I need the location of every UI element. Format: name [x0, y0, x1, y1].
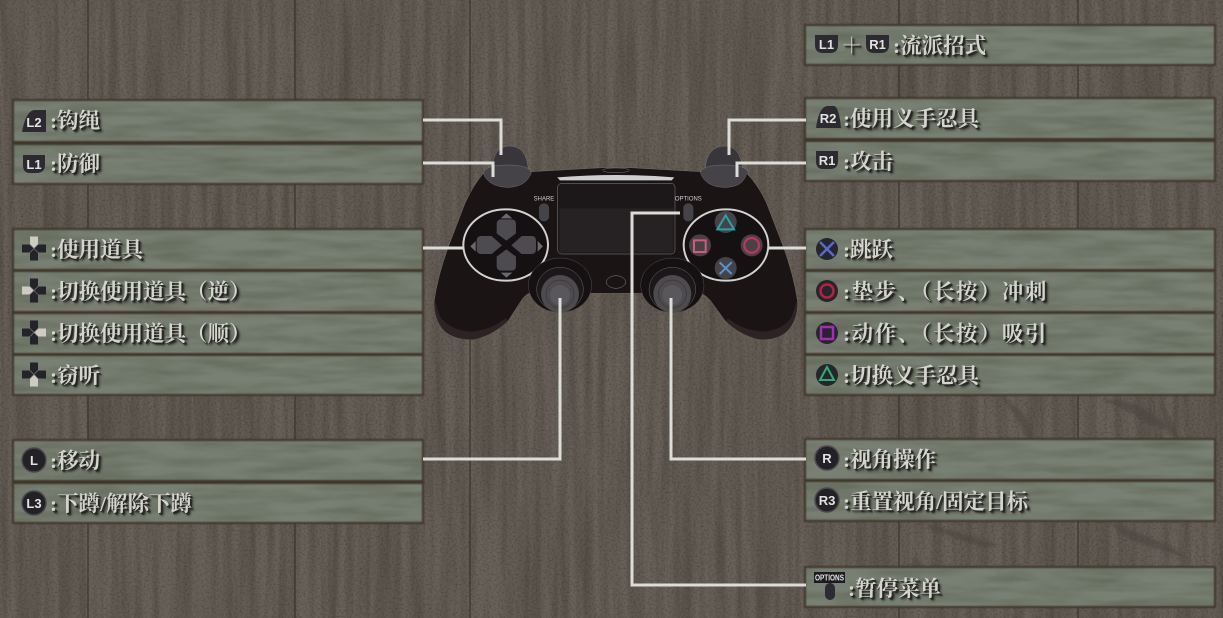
panel: L1 guard: L1 — [26, 157, 42, 172]
panel: left stick move: L — [30, 453, 38, 468]
panel: options pause menu — [814, 572, 944, 602]
panel: R2 prosthetic tool: R2 — [820, 111, 836, 126]
panel: right stick camera — [814, 445, 939, 473]
panel: right stick camera: R — [822, 451, 832, 466]
panel: right stick camera: :视角操作 — [843, 448, 936, 472]
panel: L1 guard: :防御 — [50, 152, 100, 176]
panel: L2 grappling: :钩绳 — [50, 109, 100, 133]
panel: d-pad left: :切换使用道具（逆） — [50, 280, 251, 304]
controller body — [434, 168, 797, 340]
panel: d-pad right: :切换使用道具（顺） — [50, 322, 251, 346]
panel: R1 attack — [816, 150, 896, 175]
panel: left stick move — [21, 447, 103, 474]
options button: OPTIONS — [675, 197, 702, 203]
panel: R2 prosthetic tool: :使用义手忍具 — [843, 107, 979, 131]
share button — [534, 197, 554, 221]
touchpad — [558, 183, 675, 254]
panel: square action: :动作、（长按）吸引 — [843, 322, 1048, 346]
panel: L2 grappling: L2 — [26, 115, 42, 130]
panel: L1 + R1 combat arts — [815, 34, 989, 59]
panel: R1 attack: R1 — [819, 153, 835, 168]
shoulder buttons — [483, 146, 749, 187]
share button: SHARE — [534, 197, 554, 203]
panel: cross jump — [816, 238, 896, 262]
panel: L1 + R1 combat arts: L1 — [819, 37, 834, 52]
options button — [675, 197, 702, 221]
panel: L1 + R1 combat arts: R1 — [869, 37, 886, 52]
panel: R3 reset camera: :重置视角/固定目标 — [843, 490, 1028, 514]
d-pad — [463, 209, 548, 281]
panel: circle dodge: :垫步、（长按）冲刺 — [843, 280, 1048, 304]
panel: d-pad up — [22, 236, 146, 263]
panel: triangle switch tool: :切换义手忍具 — [843, 364, 979, 388]
panel: options pause menu: OPTIONS — [815, 574, 845, 582]
panel: d-pad down — [22, 362, 103, 389]
panel: L1 + R1 combat arts: :流派招式 — [893, 34, 986, 58]
face buttons — [684, 209, 768, 281]
panel: d-pad up: :使用道具 — [50, 238, 143, 262]
panel: cross jump: :跳跃 — [843, 238, 893, 262]
light bar — [557, 175, 674, 180]
panel: left stick move: :移动 — [50, 449, 100, 473]
panel: R1 attack: :攻击 — [843, 150, 893, 174]
panel: d-pad down: :窃听 — [50, 364, 100, 388]
panel: R3 reset camera: R3 — [819, 493, 835, 508]
panel: L2 grappling — [22, 109, 104, 134]
ps button — [606, 276, 626, 288]
panel: L1 guard — [23, 152, 103, 177]
left stick — [528, 258, 592, 313]
panel: L3 crouch: L3 — [26, 496, 42, 511]
panel: L3 crouch: :下蹲/解除下蹲 — [50, 492, 192, 516]
panel: options pause menu: :暂停菜单 — [848, 577, 941, 601]
right stick — [641, 258, 704, 313]
panel: L1 + R1 combat arts: ＋ — [841, 34, 863, 58]
